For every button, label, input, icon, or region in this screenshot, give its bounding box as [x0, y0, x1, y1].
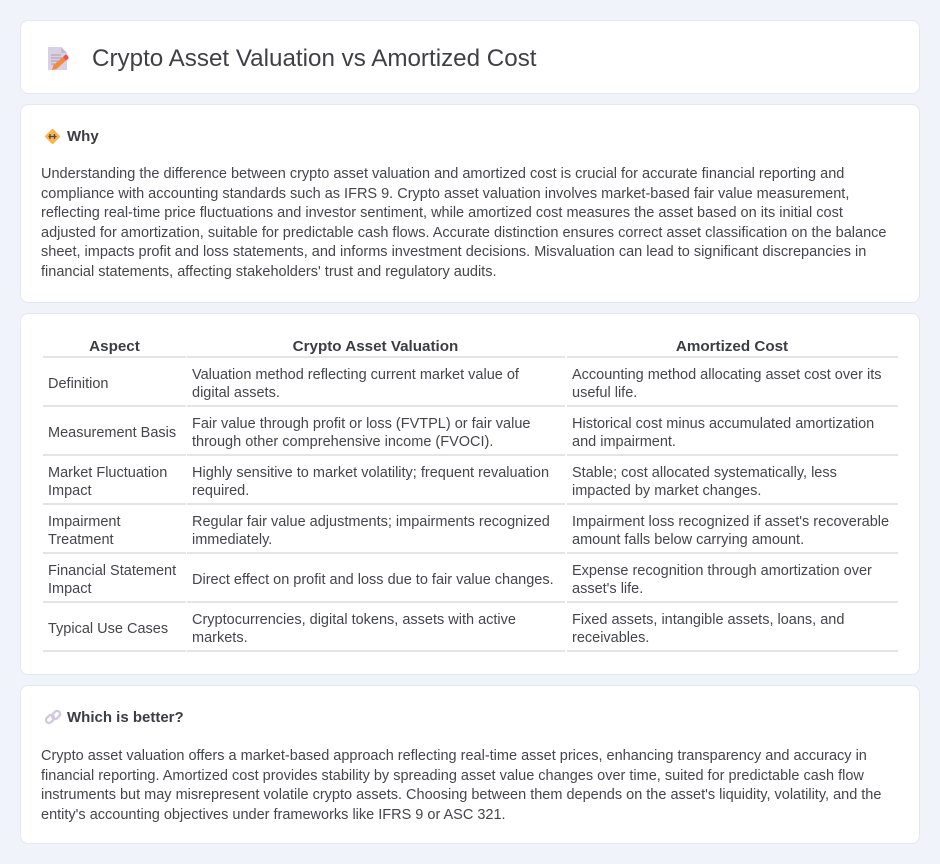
text block: why explanation: financial statements, affecting stakeholders' trust and regulatory audits. [41, 264, 496, 280]
row: impairment treatment: Impairment loss recognized if asset's recoverable [572, 514, 889, 530]
row: definition: digital assets. [192, 385, 280, 401]
row: definition: useful life. [572, 385, 637, 401]
text block: verdict: financial reporting. Amortized cost provides stability by spreading asset value changes over time, suited for predictable cash flow [41, 768, 864, 784]
row: market fluctuation impact: required. [192, 483, 249, 499]
row: impairment treatment [43, 514, 898, 554]
row: market fluctuation impact [43, 465, 898, 505]
row: typical use cases: Fixed assets, intangible assets, loans, and [572, 612, 844, 628]
heading: why: Why [67, 128, 99, 145]
row: impairment treatment: Treatment [48, 532, 114, 548]
text block: why explanation: adjusted for amortization, suitable for predictable cash flows. Accurate distinction ensures correct asset classification on the balance [41, 225, 886, 241]
icon: warning diamond [45, 129, 60, 144]
text block: why explanation: sheet, impacts profit and loss statements, and informs investment decisions. Misvaluation can lead to significant discrepancies in [41, 244, 866, 260]
table header: Amortized Cost [676, 338, 788, 355]
text block: verdict: Crypto asset valuation offers a market-based approach reflecting real-time asset prices, enhancing transparency and accuracy in [41, 748, 867, 764]
panel: comparison table [20, 313, 920, 675]
row: financial statement impact: Impact [48, 581, 92, 597]
icon: chain link [44, 710, 62, 724]
icon: document with pencil [48, 47, 69, 70]
row: financial statement impact: Expense recognition through amortization over [572, 563, 872, 579]
row: market fluctuation impact: Impact [48, 483, 92, 499]
table header: Crypto Asset Valuation [293, 338, 458, 355]
row: market fluctuation impact: Stable; cost allocated systematically, less [572, 465, 837, 481]
row: measurement basis: Historical cost minus accumulated amortization [572, 416, 874, 432]
row: definition: Definition [48, 376, 108, 392]
row: market fluctuation impact: Highly sensitive to market volatility; frequent revaluation [192, 465, 549, 481]
text block: verdict [41, 748, 881, 823]
row: typical use cases: Cryptocurrencies, digital tokens, assets with active [192, 612, 516, 628]
panel: why [20, 104, 920, 303]
text block: why explanation: compliance with accounting standards such as IFRS 9. Crypto asset valuation involves market-based fair value measurement, [41, 186, 849, 202]
row: financial statement impact: Direct effect on profit and loss due to fair value changes. [192, 572, 554, 588]
table header: Aspect [89, 338, 140, 355]
row: impairment treatment: immediately. [192, 532, 272, 548]
row: financial statement impact [43, 563, 898, 603]
table header [43, 338, 898, 358]
text block: why explanation: reflecting real-time price fluctuations and investor sentiment, while amortized cost measures the asset based on its initial cost [41, 205, 843, 221]
text block: why explanation [41, 166, 886, 280]
row: typical use cases: receivables. [572, 630, 649, 646]
row: market fluctuation impact: impacted by market changes. [572, 483, 761, 499]
row: measurement basis: through other comprehensive income (FVOCI). [192, 434, 493, 450]
row: definition: Valuation method reflecting current market value of [192, 367, 519, 383]
panel: which is better [20, 685, 920, 844]
panel: title card [20, 20, 920, 94]
text block: why explanation: Understanding the difference between crypto asset valuation and amortized cost is crucial for accurate financial reporting and [41, 166, 844, 182]
row: financial statement impact: Financial Statement [48, 563, 176, 579]
row: financial statement impact: asset's life. [572, 581, 643, 597]
heading: which is better: Which is better? [67, 709, 184, 726]
row: impairment treatment: Impairment [48, 514, 121, 530]
row: market fluctuation impact: Market Fluctuation [48, 465, 167, 481]
row: measurement basis: Fair value through profit or loss (FVTPL) or fair value [192, 416, 530, 432]
title: Crypto Asset Valuation vs Amortized Cost [92, 45, 537, 72]
row: definition: Accounting method allocating asset cost over its [572, 367, 882, 383]
row: impairment treatment: Regular fair value adjustments; impairments recognized [192, 514, 550, 530]
row: definition [43, 367, 898, 407]
row: measurement basis: and impairment. [572, 434, 676, 450]
row: typical use cases [43, 612, 898, 652]
row: impairment treatment: amount falls below carrying amount. [572, 532, 804, 548]
row: measurement basis [43, 416, 898, 456]
row: typical use cases: markets. [192, 630, 248, 646]
text block: verdict: instruments but may misrepresent volatile crypto assets. Choosing between them depends on the asset's liquidity, volatility, and the [41, 787, 881, 803]
row: typical use cases: Typical Use Cases [48, 621, 168, 637]
text block: verdict: entity's accounting objectives under frameworks like IFRS 9 or ASC 321. [41, 807, 506, 823]
row: measurement basis: Measurement Basis [48, 425, 176, 441]
